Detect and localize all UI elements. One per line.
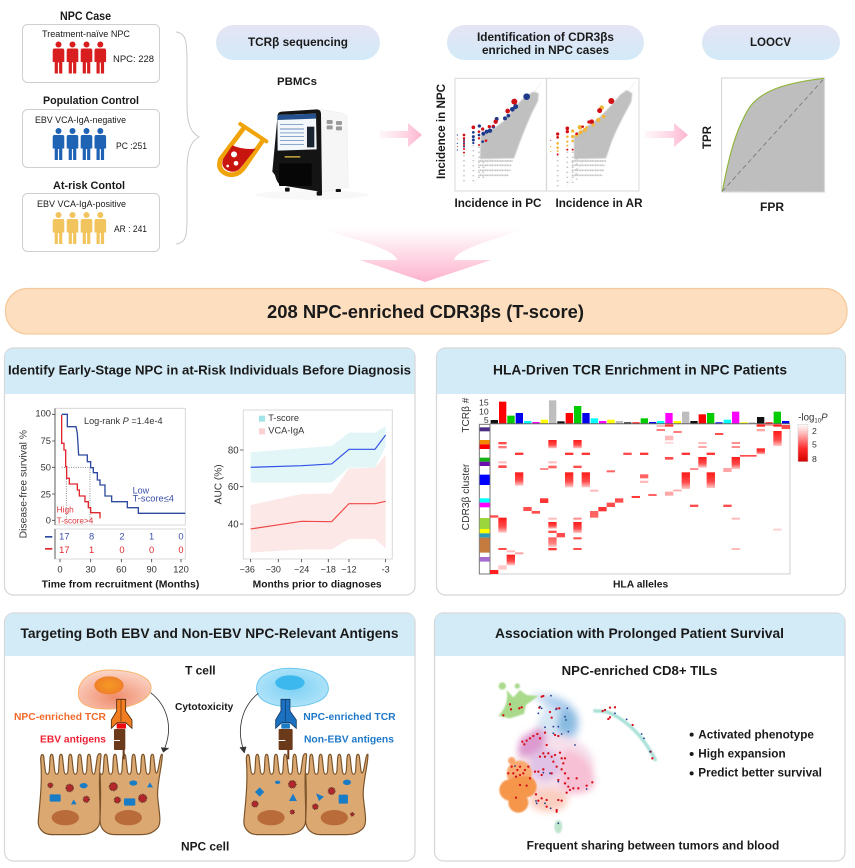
legend: -log10P colour scale: -log xyxy=(798,412,814,423)
cohort: population control: EBV VCA-IgA-negative xyxy=(35,115,126,125)
icon: sequencing machine xyxy=(255,109,368,200)
cohort: population control xyxy=(22,95,160,168)
diagram: T cell recognition of NPC cells: EBV antigens xyxy=(40,735,106,746)
step pill: TCR sequencing xyxy=(216,25,380,60)
chart: Kaplan-Meier survival: T-score≤4 xyxy=(133,494,174,504)
heading: Association with Prolonged Patient Survival xyxy=(495,626,784,641)
legend: -log10P colour scale: 10 xyxy=(814,418,822,424)
legend: -log10P colour scale xyxy=(798,412,828,464)
chart: heatmap with bars: 5 xyxy=(484,415,489,425)
bar chart: TCRβ count per allele xyxy=(491,400,789,423)
arrow: sequencing to identification xyxy=(380,123,422,147)
chart: Kaplan-Meier survival: Disease-free survival % xyxy=(18,430,29,538)
chart: heatmap with bars: TCRβ # xyxy=(461,397,472,433)
chart: Kaplan-Meier survival: 75 xyxy=(41,436,51,446)
axis label: incidence in NPC: Incidence in NPC xyxy=(435,83,448,179)
chart: Kaplan-Meier survival: 60 xyxy=(116,565,127,575)
cohort: at-risk control: AR : 241 xyxy=(114,224,147,234)
cohort: at-risk control: EBV VCA-IgA-positive xyxy=(37,199,126,209)
panel: prolonged patient survival xyxy=(434,613,845,861)
chart: AUC over time: Months prior to diagnoses xyxy=(253,580,382,591)
chart: AUC over time: 80 xyxy=(228,445,239,456)
diagram: T cell recognition of NPC cells: NPC-enriched TCR xyxy=(14,712,107,723)
chart: AUC over time: −24 xyxy=(294,565,309,575)
step pill: identification: enriched in NPC cases xyxy=(482,43,609,57)
panel: HLA-driven TCR enrichment xyxy=(436,348,846,595)
chart: Kaplan-Meier survival: 0 xyxy=(178,532,184,542)
label: PBMCs: PBMCs xyxy=(277,76,317,88)
list: phenotype bullets: Predict better survival xyxy=(698,767,822,780)
chart: heatmap with bars: HLA alleles xyxy=(613,580,669,591)
chart: AUC over time: T-score xyxy=(268,413,299,423)
arrow: identification to LOOCV xyxy=(645,123,688,147)
cohort: NPC case: Treatment-naïve NPC xyxy=(42,29,131,39)
chart: heatmap with bars: 15 xyxy=(479,398,489,408)
chart: heatmap with bars: CDR3β cluster xyxy=(461,463,472,530)
panel: EBV and non-EBV antigen targeting xyxy=(4,613,415,861)
banner: 208 NPC-enriched CDR3βs xyxy=(6,288,847,334)
chart: Kaplan-Meier survival: 50 xyxy=(41,463,51,473)
axis label: TPR: TPR xyxy=(702,125,714,149)
chart: Kaplan-Meier survival: 17 xyxy=(59,545,70,555)
panel: prolonged patient survival: NPC-enriched CD8+ TILs xyxy=(562,663,717,678)
arrow: cytotoxicity right xyxy=(240,693,258,753)
chart: heatmap with bars: 10 xyxy=(479,406,489,416)
banner: 208 NPC-enriched CDR3βs: 208 NPC-enriched CDR3βs (T-score) xyxy=(267,301,584,322)
chart: AUC over time: -3 xyxy=(382,565,390,575)
chart: Kaplan-Meier survival: Time from recruitment (Months) xyxy=(42,580,199,591)
diagram: T cell recognition of NPC cells: NPC-enriched TCR xyxy=(303,712,396,723)
chart: AUC over time: AUC (%) xyxy=(214,464,225,504)
chart: Kaplan-Meier survival: 120 xyxy=(173,565,189,575)
legend: -log10P colour scale: 8 xyxy=(812,454,817,464)
chart: Kaplan-Meier survival: T-score>4 xyxy=(57,516,94,525)
diagram: T cell recognition of NPC cells xyxy=(14,663,396,854)
arrow: large pink down arrow xyxy=(316,228,529,282)
chart: Kaplan-Meier survival: 17 xyxy=(59,532,70,542)
cohort: NPC case xyxy=(22,11,160,82)
step pill: identification xyxy=(447,25,644,60)
step pill: TCR sequencing: TCRβ sequencing xyxy=(248,35,348,49)
chart: AUC over time: −18 xyxy=(321,565,336,575)
chart: Kaplan-Meier survival: 8 xyxy=(89,532,94,542)
list: phenotype bullets xyxy=(690,729,822,780)
panel: prolonged patient survival: Frequent sharing between tumors and blood xyxy=(527,838,779,852)
heatmap cells xyxy=(490,424,790,574)
chart: Kaplan-Meier survival: 1 xyxy=(89,545,94,555)
icon: orange T cell xyxy=(78,670,151,709)
chart: Kaplan-Meier survival xyxy=(18,408,199,591)
chart: Kaplan-Meier survival: 25 xyxy=(41,489,51,499)
chart: AUC over time: VCA-IgA xyxy=(268,426,305,436)
step pill: identification: Identification of CDR3βs xyxy=(477,30,614,44)
chart: UMAP of CD8+ TILs xyxy=(498,682,656,833)
chart: Kaplan-Meier survival: 2 xyxy=(119,532,125,542)
icon: test tube xyxy=(219,124,266,175)
chart: Kaplan-Meier survival: 100 xyxy=(35,409,51,419)
chart: AUC over time: 60 xyxy=(228,482,239,493)
cohort: at-risk control xyxy=(22,180,160,252)
chart: Kaplan-Meier survival: High xyxy=(57,505,74,515)
legend: -log10P colour scale: 2 xyxy=(812,426,817,436)
scatter plots: incidence in NPC vs PC and AR xyxy=(455,78,639,191)
cohort: population control: Population Control xyxy=(43,95,139,107)
step pill: LOOCV: LOOCV xyxy=(750,37,791,49)
diagram: T cell recognition of NPC cells: T cell xyxy=(185,663,216,677)
heading: HLA-Driven TCR Enrichment in NPC Patients xyxy=(493,362,787,378)
chart: AUC over time: −12 xyxy=(341,565,357,575)
chart: Kaplan-Meier survival: 30 xyxy=(85,565,96,575)
heatmap frame and cluster strip xyxy=(479,424,790,574)
axis label: incidence in AR: Incidence in AR xyxy=(556,197,643,210)
chart: AUC over time xyxy=(214,410,392,591)
chart: AUC over time: −30 xyxy=(266,565,281,575)
illustration: right NPC cells with non-EBV antigens xyxy=(244,754,368,835)
axis label: incidence in PC: Incidence in PC xyxy=(454,197,542,210)
illustration: left NPC cells with EBV antigens xyxy=(38,754,162,835)
icon: orange TCR with EBV antigen xyxy=(111,699,132,759)
legend: -log10P colour scale: P xyxy=(821,412,828,423)
icon: blue T cell xyxy=(257,668,328,707)
ROC curve xyxy=(722,78,825,192)
chart: Kaplan-Meier survival: 1 xyxy=(149,532,154,542)
chart: heatmap with bars xyxy=(461,397,828,591)
diagram: T cell recognition of NPC cells: NPC cell xyxy=(181,840,229,854)
icon: blue TCR with non-EBV antigen xyxy=(276,699,296,759)
cohort: NPC case: NPC Case xyxy=(60,11,111,23)
chart: Kaplan-Meier survival: 0 xyxy=(119,545,125,555)
diagram: T cell recognition of NPC cells: Non-EBV antigens xyxy=(304,735,394,746)
chart: Kaplan-Meier survival: 0 xyxy=(46,516,51,526)
step pill: LOOCV xyxy=(702,25,840,60)
arrow: cytotoxicity left xyxy=(151,693,169,752)
chart: Kaplan-Meier survival: 0 xyxy=(57,565,63,575)
chart: Kaplan-Meier survival: 0 xyxy=(178,545,184,555)
chart: AUC over time: −36 xyxy=(240,565,255,575)
legend: -log10P colour scale: 5 xyxy=(812,440,817,450)
list: phenotype bullets: Activated phenotype xyxy=(698,729,814,742)
brace xyxy=(176,32,199,244)
chart: Kaplan-Meier survival: 90 xyxy=(146,565,157,575)
chart: Kaplan-Meier survival: Log-rank P =1.4e-4 xyxy=(84,416,163,426)
heading: Targeting Both EBV and Non-EBV NPC-Relevant Antigens xyxy=(20,626,399,641)
chart: Kaplan-Meier survival: 0 xyxy=(149,545,154,555)
heading: Identify Early-Stage NPC in at-Risk Individuals Before Diagnosis xyxy=(8,362,411,378)
cohort: NPC case: NPC: 228 xyxy=(113,54,154,64)
diagram: T cell recognition of NPC cells: Cytotoxicity xyxy=(175,702,234,713)
cohort: at-risk control: At-risk Contol xyxy=(53,180,125,192)
list: phenotype bullets: High expansion xyxy=(698,748,786,761)
panel: early-stage NPC identification xyxy=(4,348,415,595)
axis label: FPR: FPR xyxy=(760,202,785,214)
chart: AUC over time: 40 xyxy=(228,519,239,530)
chart: Kaplan-Meier survival: Low xyxy=(133,485,150,495)
cohort: population control: PC :251 xyxy=(116,141,147,151)
